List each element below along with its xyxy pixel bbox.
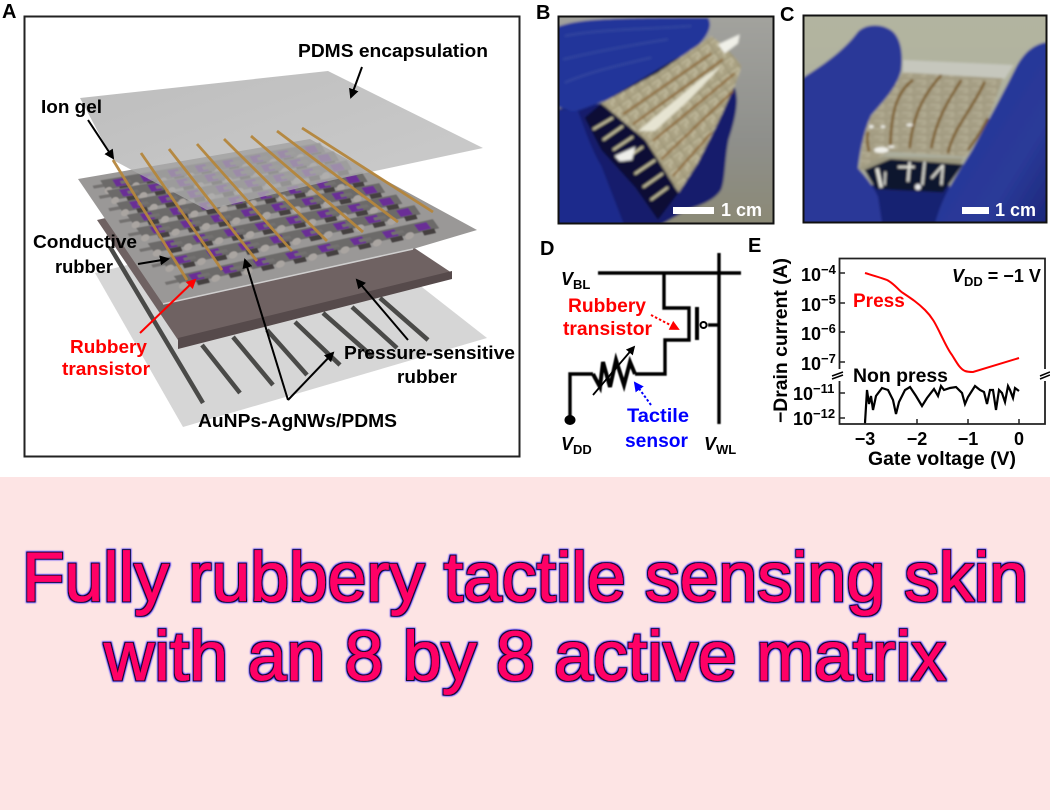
y tick labels: −11 <box>813 381 834 396</box>
label: VDD: DD <box>573 442 592 457</box>
label: Tactile sensor: sensor <box>625 431 689 452</box>
panel D: circuit diagram <box>540 238 741 457</box>
circuit wires <box>570 253 741 424</box>
bottom PDMS sheet with electrodes <box>95 215 487 427</box>
label: VBL: BL <box>573 277 590 292</box>
arrow: pressure-sensitive rubber <box>357 280 408 340</box>
x tick labels: −3 <box>855 429 875 449</box>
y tick labels: −4 <box>821 262 837 277</box>
x tick labels <box>855 429 1024 449</box>
y axis title: −Drain current (A) <box>771 258 792 423</box>
variable resistor arrow <box>593 347 634 395</box>
y tick labels: 10 <box>793 409 813 429</box>
gate bubble <box>700 322 706 328</box>
panel E: transfer curve chart <box>748 235 1050 470</box>
label: Rubbery transistor <box>62 336 150 379</box>
label: Conductive rubber: Conductive <box>33 232 137 252</box>
label: Conductive rubber: rubber <box>55 257 113 277</box>
label: Rubbery transistor: transistor <box>62 358 150 379</box>
x tick labels: −2 <box>907 429 927 449</box>
y tick labels <box>793 262 837 429</box>
plot frame <box>840 258 1045 424</box>
PDMS encapsulation sheet <box>80 71 483 210</box>
scale bar B: 1 cm <box>721 200 762 220</box>
panel C: photo of compressed device <box>800 12 1050 225</box>
title: Fully rubbery tactile sensing skin <box>22 538 1028 616</box>
arrow: rubbery transistor <box>140 280 195 333</box>
y tick labels: 10 <box>801 265 821 285</box>
y tick labels: 10 <box>793 384 813 404</box>
axis break marks <box>832 372 1050 379</box>
scale bar C: 1 cm <box>995 200 1036 220</box>
panel label A: A <box>2 1 16 23</box>
label: VWL: V <box>704 434 716 454</box>
rubbery transistor sheet <box>78 139 477 304</box>
title: with an 8 by 8 active matrix <box>103 617 946 695</box>
non-press curve <box>865 386 1019 423</box>
label: Rubbery transistor: Rubbery <box>568 296 646 317</box>
frame B <box>558 16 774 224</box>
dotted arrow: tactile sensor <box>635 383 651 405</box>
press curve <box>865 273 1019 372</box>
label: VWL: WL <box>716 442 736 457</box>
dotted arrow: rubbery transistor <box>651 315 678 329</box>
label: Press: Press <box>853 291 905 312</box>
y tick labels: −6 <box>821 321 836 336</box>
panel label B: B <box>536 2 550 24</box>
label: Pressure-sensitive rubber <box>344 343 515 387</box>
label: VDD = -1 V: DD <box>964 274 983 289</box>
title <box>22 538 1028 695</box>
x tick labels: 0 <box>1014 429 1024 449</box>
label: Tactile sensor: Tactile <box>627 406 689 427</box>
label: VBL: V <box>561 269 573 289</box>
label: Pressure-sensitive rubber: rubber <box>397 367 457 387</box>
label: Rubbery transistor: Rubbery <box>70 336 148 357</box>
frame C <box>804 16 1046 222</box>
panel label D: D <box>540 238 554 260</box>
8 by 8 transistor array <box>93 142 439 293</box>
y tick labels: −5 <box>821 292 836 307</box>
panel B: photo of bent device <box>555 13 777 226</box>
y tick labels: −7 <box>821 351 836 366</box>
panel label E: E <box>748 235 761 257</box>
label: Rubbery transistor <box>563 296 653 340</box>
pressure-sensitive rubber layer <box>97 172 452 349</box>
x axis title: Gate voltage (V) <box>868 449 1016 470</box>
y tick labels: −12 <box>813 406 835 421</box>
label: Non press: Non press <box>853 366 948 387</box>
scale bar C <box>962 200 1036 220</box>
arrow: conductive rubber <box>138 259 168 264</box>
background band <box>0 477 1050 810</box>
label: AuNPs-AgNWs/PDMS: AuNPs-AgNWs/PDMS <box>198 411 397 431</box>
y tick labels: 10 <box>801 354 821 374</box>
panel A: exploded device diagram <box>2 1 520 456</box>
label: Conductive rubber <box>33 232 137 277</box>
label: VDD: V <box>561 434 573 454</box>
y tick labels: 10 <box>801 295 821 315</box>
arrow: ion gel <box>88 120 113 158</box>
panel label C: C <box>780 4 794 26</box>
label: Rubbery transistor: transistor <box>563 319 653 340</box>
panel A frame <box>24 16 520 456</box>
scale bar B <box>673 200 762 220</box>
x tick labels: −1 <box>958 429 978 449</box>
arrow: PDMS <box>351 67 362 97</box>
label: Pressure-sensitive rubber: Pressure-sensitive <box>344 343 515 363</box>
label: VDD = -1 V: V <box>952 266 966 286</box>
tick marks <box>840 273 1019 424</box>
label: VDD = -1 V: = −1 V <box>983 266 1041 286</box>
arrows: AuNPs-AgNWs/PDMS <box>245 260 333 400</box>
VDD terminal dot <box>564 415 576 425</box>
label: Tactile sensor <box>625 406 689 452</box>
ion gel lines <box>113 128 433 280</box>
label: Ion gel: Ion gel <box>41 97 102 117</box>
label: PDMS encapsulation: PDMS encapsulation <box>298 41 488 61</box>
y tick labels: 10 <box>801 324 821 344</box>
